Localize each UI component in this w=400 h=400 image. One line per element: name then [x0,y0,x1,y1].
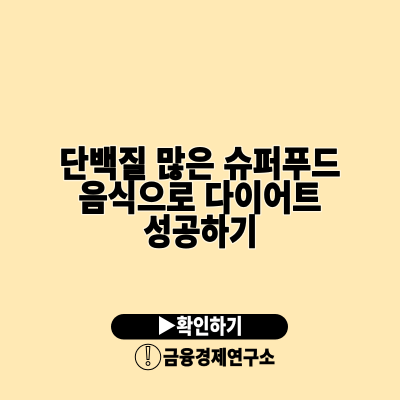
title: 성공하기 [144,214,258,252]
title: 단백질 많은 슈퍼푸드 [60,146,340,184]
button: 확인하기 [111,314,288,340]
icon: exclamation circle [135,344,161,370]
button label: 확인하기 [176,316,242,338]
source label: 금융경제연구소 [163,347,275,369]
title: 음식으로 다이어트 [78,180,322,218]
icon: play triangle [159,316,176,335]
title: 성공하기 [144,214,258,252]
source line [135,344,275,370]
title [60,146,340,252]
title: 단백질 많은 슈퍼푸드 [60,146,340,184]
title: 음식으로 다이어트 [78,180,322,218]
